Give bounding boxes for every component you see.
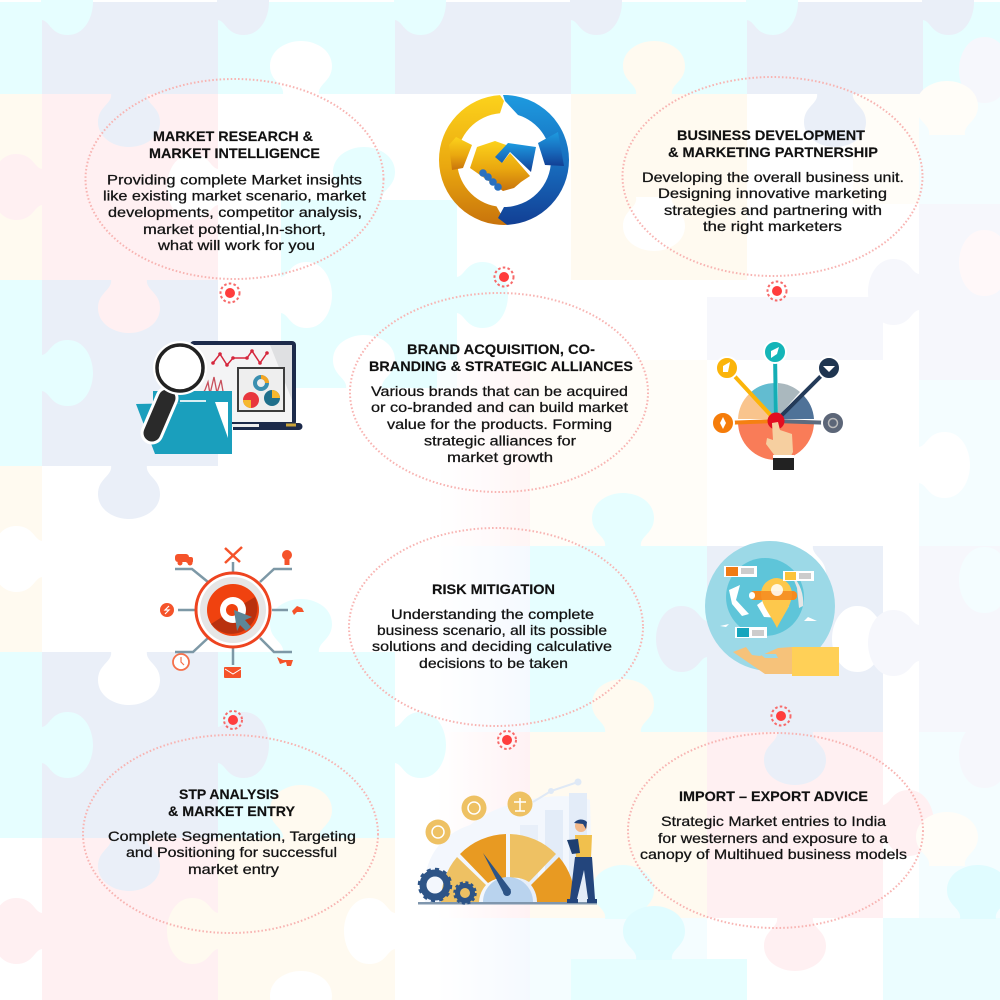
heading: brand acquisition <box>369 342 633 374</box>
heading: business development <box>668 128 878 160</box>
heading: brand acquisition: BRANDING & STRATEGIC ALLIANCES <box>369 359 633 374</box>
text: import export body: canopy of Multihued business models <box>640 847 907 862</box>
heading: brand acquisition: BRAND ACQUISITION, CO- <box>407 342 595 357</box>
text: market research body: developments, competitor analysis, <box>108 205 362 220</box>
text: brand acquisition body <box>371 384 628 465</box>
connector dot 6 <box>772 706 790 726</box>
heading: risk mitigation: RISK MITIGATION <box>432 582 555 597</box>
connector dot 5 <box>498 731 516 749</box>
text: market research body: market potential,In-short, <box>143 222 326 237</box>
text: risk mitigation body: decisions to be taken <box>419 656 568 671</box>
icon: target with spokes <box>160 547 304 678</box>
heading: STP analysis <box>168 787 295 819</box>
text: import export body <box>640 814 907 862</box>
panel: market research <box>86 79 384 279</box>
dotted ellipse: market research <box>86 79 384 279</box>
connector dot 1 <box>220 284 240 302</box>
text: brand acquisition body: or co-branded and can build market <box>371 400 628 415</box>
text: brand acquisition body: strategic alliances for <box>424 434 577 448</box>
heading: market research: MARKET RESEARCH & <box>153 129 313 144</box>
heading: import export: IMPORT – EXPORT ADVICE <box>679 789 868 804</box>
icon: hub with hand <box>712 341 844 470</box>
text: brand acquisition body: value for the products. Forming <box>387 417 612 432</box>
dotted ellipse: risk mitigation <box>349 528 643 726</box>
connector dot 2 <box>494 268 514 286</box>
panel: business development <box>622 77 922 276</box>
icon: folder, laptop and magnifier <box>136 341 302 454</box>
heading: market research <box>149 129 320 161</box>
panel: brand acquisition <box>350 293 648 492</box>
heading: STP analysis: STP ANALYSIS <box>179 787 279 802</box>
text: business development body: strategies and partnering with <box>664 203 882 218</box>
heading: STP analysis: & MARKET ENTRY <box>168 804 295 819</box>
text: business development body <box>642 170 904 234</box>
panel: STP analysis <box>83 735 378 933</box>
icon: gauge with person <box>418 778 597 904</box>
text: market research body <box>103 172 366 253</box>
icon: handshake <box>439 95 569 225</box>
icon: globe on hand <box>705 541 839 676</box>
heading: business development: BUSINESS DEVELOPMENT <box>677 128 866 143</box>
text: risk mitigation body: Understanding the complete <box>391 607 594 622</box>
text: market research body: what will work for you <box>157 238 315 253</box>
text: STP analysis body <box>108 829 356 877</box>
text: risk mitigation body: business scenario, all its possible <box>377 623 607 638</box>
heading: market research: MARKET INTELLIGENCE <box>149 146 320 161</box>
connector dot 4 <box>224 711 242 729</box>
text: risk mitigation body: solutions and deciding calculative <box>372 639 612 654</box>
text: business development body: the right marketers <box>703 219 842 234</box>
heading: business development: & MARKETING PARTNERSHIP <box>668 145 878 160</box>
dotted ellipse: STP analysis <box>83 735 378 933</box>
text: STP analysis body: market entry <box>188 862 279 877</box>
connector dot 3 <box>768 282 786 300</box>
text: brand acquisition body: Various brands that can be acquired <box>371 384 628 399</box>
panel: risk mitigation <box>349 528 643 726</box>
text: risk mitigation body <box>372 607 612 671</box>
text: STP analysis body: and Positioning for successful <box>126 845 337 860</box>
text: market research body: Providing complete Market insights <box>107 172 362 188</box>
text: import export body: Strategic Market entries to India <box>661 814 887 829</box>
dotted ellipse: brand acquisition <box>350 293 648 492</box>
dotted ellipse: business development <box>622 77 922 276</box>
text: import export body: for westerners and exposure to a <box>658 831 889 846</box>
dotted ellipse: import export <box>628 733 923 928</box>
text: STP analysis body: Complete Segmentation, Targeting <box>108 829 356 844</box>
text: market research body: like existing market scenario, market <box>103 188 366 204</box>
text: business development body: Designing innovative marketing <box>658 186 887 201</box>
panel: import export advice <box>628 733 923 928</box>
text: business development body: Developing the overall business unit. <box>642 170 904 185</box>
text: brand acquisition body: market growth <box>447 450 553 465</box>
